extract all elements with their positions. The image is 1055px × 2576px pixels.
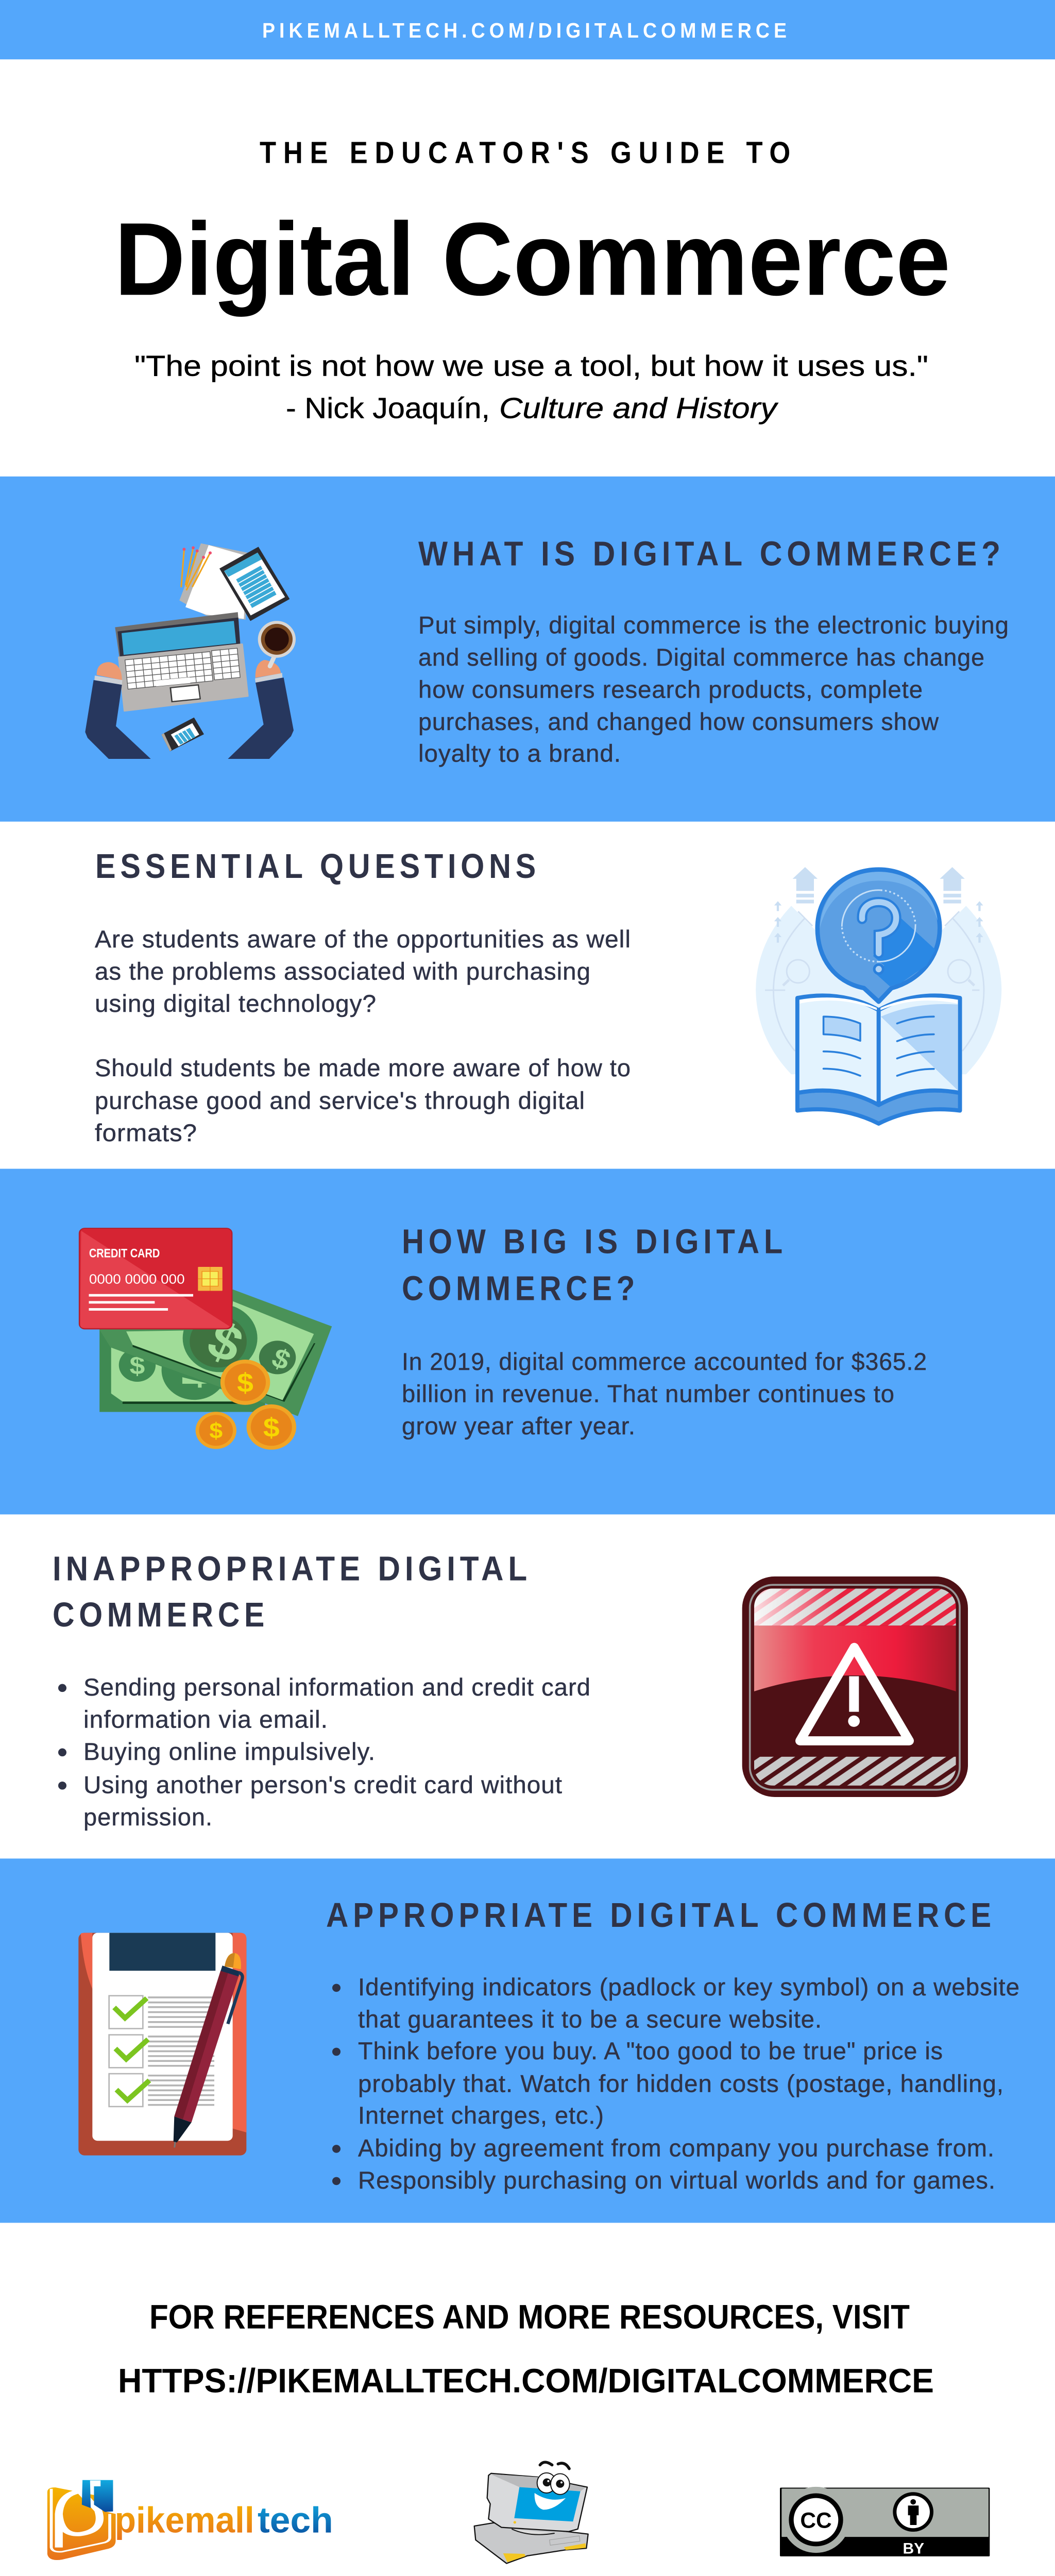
icon: computer mascot (474, 2462, 588, 2564)
icon: credit card and money: CREDIT CARD (89, 1246, 160, 1260)
logo: creative commons by: BY (903, 2540, 924, 2557)
bullet list: probably that. Watch for hidden costs (postage, handling, (358, 2071, 1004, 2097)
bullet list: that guarantees it to be a secure website. (358, 2006, 822, 2033)
paragraph: as the problems associated with purchasing (95, 958, 591, 985)
icon: credit card and money: $ (237, 1368, 253, 1398)
bullet list: Buying online impulsively. (83, 1739, 376, 1766)
paragraph: using digital technology? (95, 990, 377, 1018)
bullet list: Sending personal information and credit card (83, 1674, 591, 1701)
heading: COMMERCE? (402, 1269, 639, 1308)
bullet list: Using another person's credit card without (83, 1772, 563, 1799)
paragraph: Are students aware of the opportunities as well (95, 926, 631, 953)
bullet list (332, 1974, 1020, 2194)
quote: Culture and History (499, 392, 779, 425)
bullet list: Identifying indicators (padlock or key symbol) on a website (358, 1974, 1020, 2001)
paragraph (402, 1349, 927, 1440)
panel: appropriate digital commerce (0, 1858, 1055, 2223)
title: Digital Commerce (114, 201, 950, 317)
heading (53, 1550, 532, 1634)
top bar url: PIKEMALLTECH.COM/DIGITALCOMMERCE (262, 19, 791, 42)
paragraph (95, 926, 631, 1147)
icon: credit card and money (79, 1228, 332, 1450)
paragraph: purchase good and service's through digital (95, 1088, 585, 1114)
heading: ESSENTIAL QUESTIONS (95, 848, 540, 886)
icon: warning sign (742, 1577, 968, 1797)
icon: credit card and money: 0000 0000 000 (89, 1272, 185, 1286)
logo: pikemalltech: pikemall (115, 2500, 254, 2540)
bullet list: Responsibly purchasing on virtual worlds and for games. (358, 2167, 996, 2194)
paragraph: grow year after year. (402, 1413, 636, 1440)
paragraph (418, 612, 1009, 767)
quote: - Nick Joaquín, (286, 392, 490, 425)
heading (402, 1223, 787, 1308)
footer call to action: FOR REFERENCES AND MORE RESOURCES, VISIT (149, 2298, 910, 2336)
icon: credit card and money: $ (130, 1351, 145, 1380)
bullet list: Think before you buy. A "too good to be true" price is (358, 2038, 943, 2065)
icon: credit card and money: $ (263, 1413, 280, 1443)
paragraph: how consumers research products, complete (418, 676, 923, 703)
footer call to action (118, 2298, 934, 2400)
heading: COMMERCE (53, 1596, 269, 1634)
paragraph: billion in revenue. That number continues to (402, 1381, 895, 1408)
bullet list: Internet charges, etc.) (358, 2103, 604, 2129)
bullet list: permission. (83, 1804, 213, 1831)
paragraph: formats? (95, 1120, 197, 1147)
icon: laptop desk illustration (85, 544, 296, 759)
logo: creative commons by: CC (800, 2509, 832, 2533)
icon: credit card and money: $ (199, 1311, 251, 1374)
logo: creative commons by (780, 2487, 990, 2557)
quote (134, 350, 928, 425)
paragraph: loyalty to a brand. (418, 740, 621, 767)
logo: pikemalltech (47, 2480, 333, 2560)
panel: how big is digital commerce (0, 1169, 1055, 1514)
quote: "The point is not how we use a tool, but how it uses us." (134, 350, 928, 382)
paragraph: purchases, and changed how consumers show (418, 708, 939, 736)
panel: top bar (0, 0, 1055, 59)
paragraph: and selling of goods. Digital commerce has change (418, 644, 985, 671)
paragraph: Put simply, digital commerce is the electronic buying (418, 612, 1009, 639)
panel: essential questions (95, 848, 1001, 1147)
bullet list (58, 1674, 591, 1831)
logo: pikemalltech: tech (258, 2500, 333, 2540)
paragraph: In 2019, digital commerce accounted for $365.2 (402, 1349, 927, 1376)
panel: what is digital commerce (0, 477, 1055, 822)
icon: credit card and money: $ (267, 1343, 295, 1376)
icon: credit card and money: $ (209, 1419, 223, 1443)
paragraph: Should students be made more aware of how to (95, 1055, 631, 1082)
bullet list: Abiding by agreement from company you purchase from. (358, 2135, 995, 2162)
icon: clipboard checklist (78, 1933, 246, 2156)
bullet list: information via email. (83, 1706, 328, 1733)
footer call to action: HTTPS://PIKEMALLTECH.COM/DIGITALCOMMERCE (118, 2362, 934, 2400)
heading: INAPPROPRIATE DIGITAL (53, 1550, 532, 1588)
heading: HOW BIG IS DIGITAL (402, 1223, 787, 1261)
panel: inappropriate digital commerce (53, 1550, 968, 1831)
icon: book with question bubble (756, 867, 1001, 1124)
subtitle: THE EDUCATOR'S GUIDE TO (260, 135, 797, 170)
